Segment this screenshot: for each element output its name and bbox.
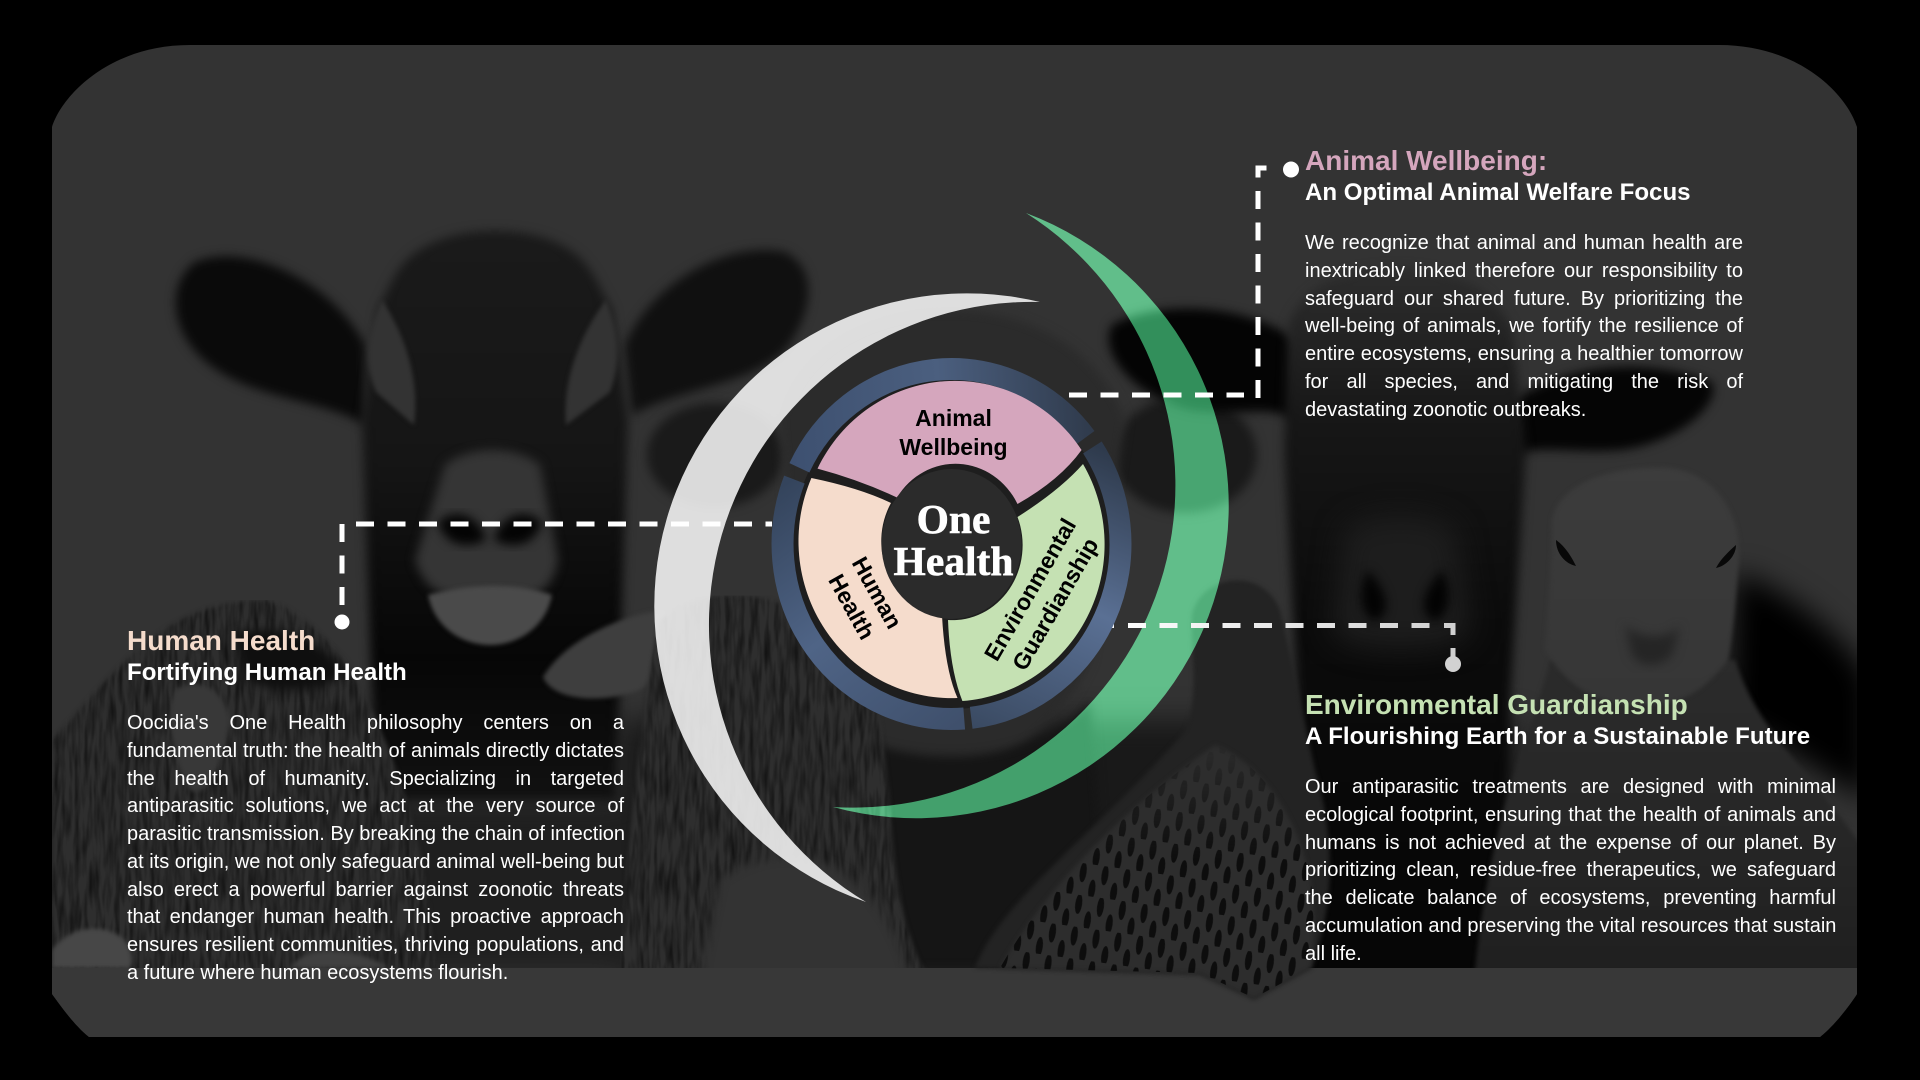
label: animal wellbeing: Wellbeing	[899, 434, 1008, 460]
body: human health	[127, 712, 625, 984]
animal: goat	[176, 231, 808, 800]
body: human health: at its origin, we not only safeguard animal well-being but	[127, 851, 624, 873]
body: human health: fundamental truth: the health of animals directly dictates	[127, 740, 624, 762]
body: animal wellbeing: entire ecosystems, ensuring a healthier tomorrow	[1305, 343, 1743, 365]
wheel dark backing	[792, 379, 1110, 709]
body: environmental guardianship: ecological footprint, ensuring that the health of animals and	[1305, 804, 1836, 826]
body: animal wellbeing: safeguard our shared future. By prioritizing the	[1305, 288, 1743, 310]
ring segment: right	[971, 447, 1120, 718]
segment: human health	[798, 478, 958, 698]
crescent: white	[654, 293, 1040, 902]
animal: lamb	[543, 596, 930, 980]
body: human health: a future where human ecosystems flourish.	[127, 962, 508, 984]
body: animal wellbeing: inextricably linked therefore our responsibility to	[1305, 260, 1743, 282]
body: human health: parasitic transmission. By breaking the chain of infection	[127, 823, 625, 845]
body: environmental guardianship: the delicate balance of ecosystems, preventing harmful	[1305, 887, 1836, 909]
label: environmental guardianship: Guardianship	[1007, 533, 1103, 675]
body: environmental guardianship: all life.	[1305, 942, 1362, 964]
text block: animal wellbeing	[1305, 145, 1744, 420]
label: animal wellbeing: Animal	[915, 405, 992, 431]
dark shadow behind sheep	[1730, 572, 1870, 800]
body: animal wellbeing	[1305, 232, 1744, 420]
animal: sheep	[1474, 468, 1870, 980]
segment: environmental guardianship	[948, 464, 1105, 701]
animal: cow	[1109, 268, 1714, 980]
one health wheel	[783, 369, 1120, 719]
heading: environmental guardianship: Environmental Guardianship	[1305, 689, 1688, 720]
body: environmental guardianship: accumulation and preserving the vital resources that sustain	[1305, 915, 1836, 937]
heading: animal wellbeing: Animal Wellbeing:	[1305, 145, 1547, 176]
animal: guinea pig	[52, 600, 438, 980]
ring segment: top	[799, 369, 1086, 468]
label: human health: Human	[847, 552, 907, 633]
text block: human health	[127, 625, 625, 984]
body: human health: the health of humanity. Specializing in targeted	[127, 768, 624, 790]
label: one health: One	[917, 496, 990, 542]
subheading: flourishing earth: A Flourishing Earth for a Sustainable Future	[1305, 723, 1810, 750]
low shadow areas	[409, 714, 1525, 968]
animal: hen	[975, 580, 1330, 1000]
body: environmental guardianship	[1305, 776, 1836, 964]
label: environmental guardianship: Environmental	[979, 514, 1081, 665]
body: environmental guardianship: Our antiparasitic treatments are designed with minimal	[1305, 776, 1836, 798]
hub	[882, 469, 1022, 619]
body: environmental guardianship: prioritizing clean, residue-free therapeutics, we safeguard	[1305, 859, 1836, 881]
connector: human health	[334, 524, 772, 630]
connector: animal wellbeing	[1069, 162, 1299, 398]
body: human health: Oocidia's One Health philosophy centers on a	[127, 712, 624, 734]
body: animal wellbeing: devastating zoonotic outbreaks.	[1305, 398, 1586, 420]
crescent: green	[833, 213, 1229, 818]
body: human health: antiparasitic solutions, we act at the very source of	[127, 795, 624, 817]
text block: environmental guardianship	[1305, 689, 1836, 964]
body: animal wellbeing: We recognize that animal and human health are	[1305, 232, 1743, 254]
label: one health: Health	[894, 538, 1013, 584]
body: human health: that endanger human health. This proactive approach	[127, 906, 624, 928]
animal: central calf	[647, 310, 1257, 968]
body: human health: also erect a powerful barrier against zoonotic threats	[127, 878, 624, 900]
body: animal wellbeing: well-being of animals, we fortify the resilience of	[1305, 315, 1743, 337]
connector: environmental guardianship	[1112, 626, 1461, 672]
ring segment: left	[783, 480, 964, 719]
body: animal wellbeing: for all species, and mitigating the risk of	[1305, 371, 1743, 393]
body: environmental guardianship: humans is not achieved at the expense of our planet. By	[1305, 832, 1836, 854]
subheading: animal welfare focus: An Optimal Animal Welfare Focus	[1305, 179, 1691, 206]
ground band	[40, 968, 1870, 1043]
subheading: fortifying human health: Fortifying Human Health	[127, 659, 407, 686]
heading: human health: Human Health	[127, 625, 315, 656]
segment: animal wellbeing	[818, 381, 1082, 504]
body: human health: ensures resilient communities, thriving populations, and	[127, 934, 624, 956]
label: human health: Health	[823, 570, 880, 644]
